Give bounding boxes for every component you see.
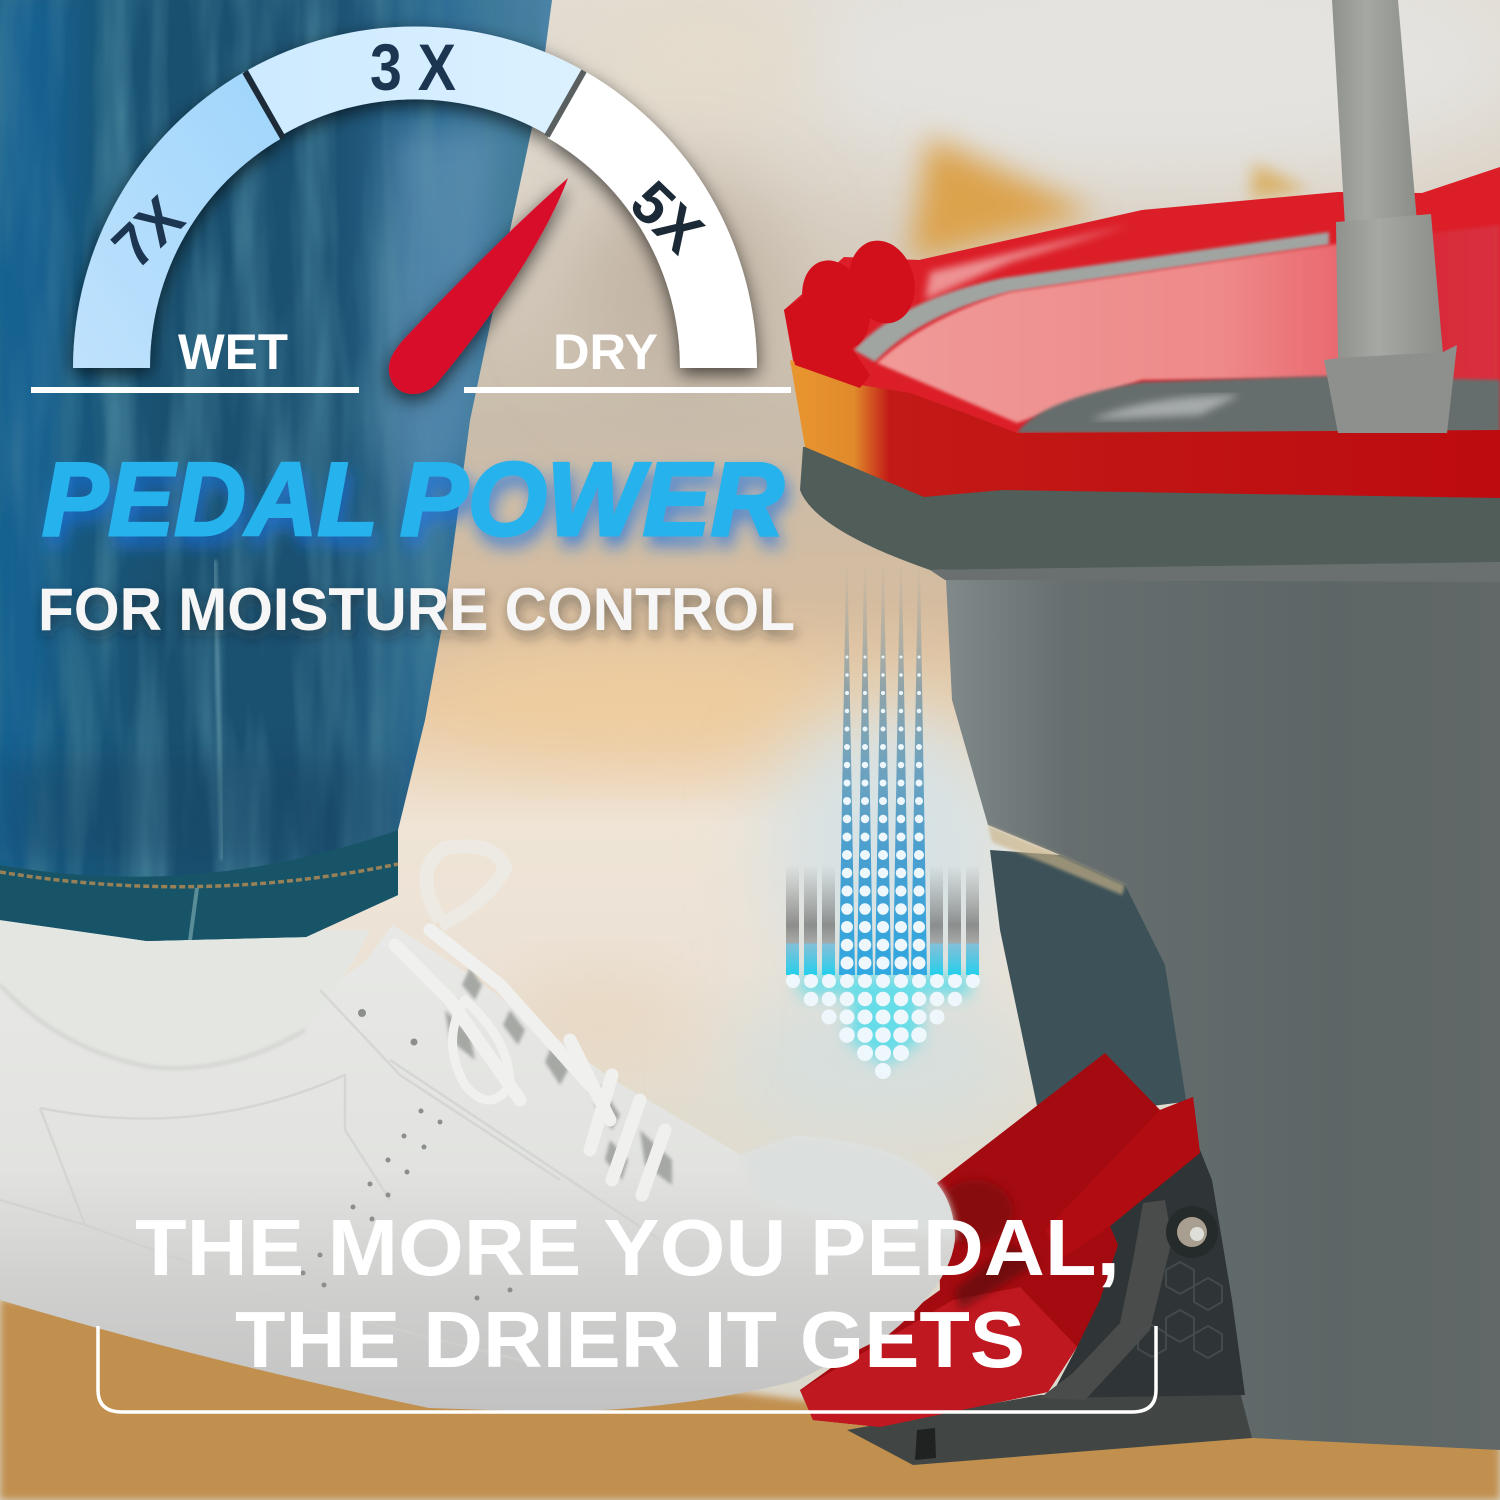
label: 5X: 5X [618,168,716,266]
arrow streaks [839,565,927,975]
word: PEDAL: PEDAL [42,442,378,558]
rim clips [784,233,924,388]
tagline [135,1203,1120,1384]
baseline left [31,387,359,393]
wooden floor [0,1298,1500,1500]
icon: dotted down arrow [786,565,979,1071]
segment: 7X [73,72,282,368]
inner gray ring [854,232,1329,362]
sneaker [0,925,955,1412]
segment: 3X [248,26,582,134]
bucket cavity [1017,376,1500,433]
front red rim band [790,360,1500,498]
callout bracket [98,1326,1156,1412]
tagline line 2: THE DRIER IT GETS [235,1295,1025,1384]
word: POWER: POWER [400,442,784,558]
arrow dots [793,657,974,1071]
shoe and sock [0,846,955,1412]
heading: PEDAL POWER [42,442,784,558]
lace gaps [445,968,672,1185]
baseline right [464,387,791,393]
bucket body [945,550,1500,1450]
pedal base [847,1392,1252,1465]
label: WET: WET [178,324,288,380]
hex mechanism [1050,1150,1245,1398]
label: DRY: DRY [553,324,658,380]
segment: 5X [548,72,757,368]
perforations [300,1009,512,1300]
bucket rear leg [990,850,1200,1120]
sock [0,915,370,1068]
rim interior [877,225,1500,423]
lace loop [426,846,505,925]
label: 7X: 7X [100,184,196,280]
mop handle [1324,0,1457,433]
arrow glow [800,975,970,1065]
needle [389,178,568,394]
red bucket rim top [784,167,1500,440]
tagline line 1: THE MORE YOU PEDAL, [135,1203,1120,1292]
mop bucket [784,0,1500,1450]
jeans leg [0,0,560,950]
subheading: FOR MOISTURE CONTROL [38,576,795,643]
toe cap [741,1136,955,1240]
bucket upper band [800,440,1500,570]
laces [395,930,665,1195]
pedal bolt [1166,1206,1218,1258]
gauge arc [73,26,757,368]
label: 3X: 3 X [370,30,456,104]
gauge [31,26,791,394]
foot pedal assembly [800,1053,1252,1465]
pedal [800,1053,1200,1427]
shoe stitching [0,990,660,1365]
jeans hem [0,830,398,941]
